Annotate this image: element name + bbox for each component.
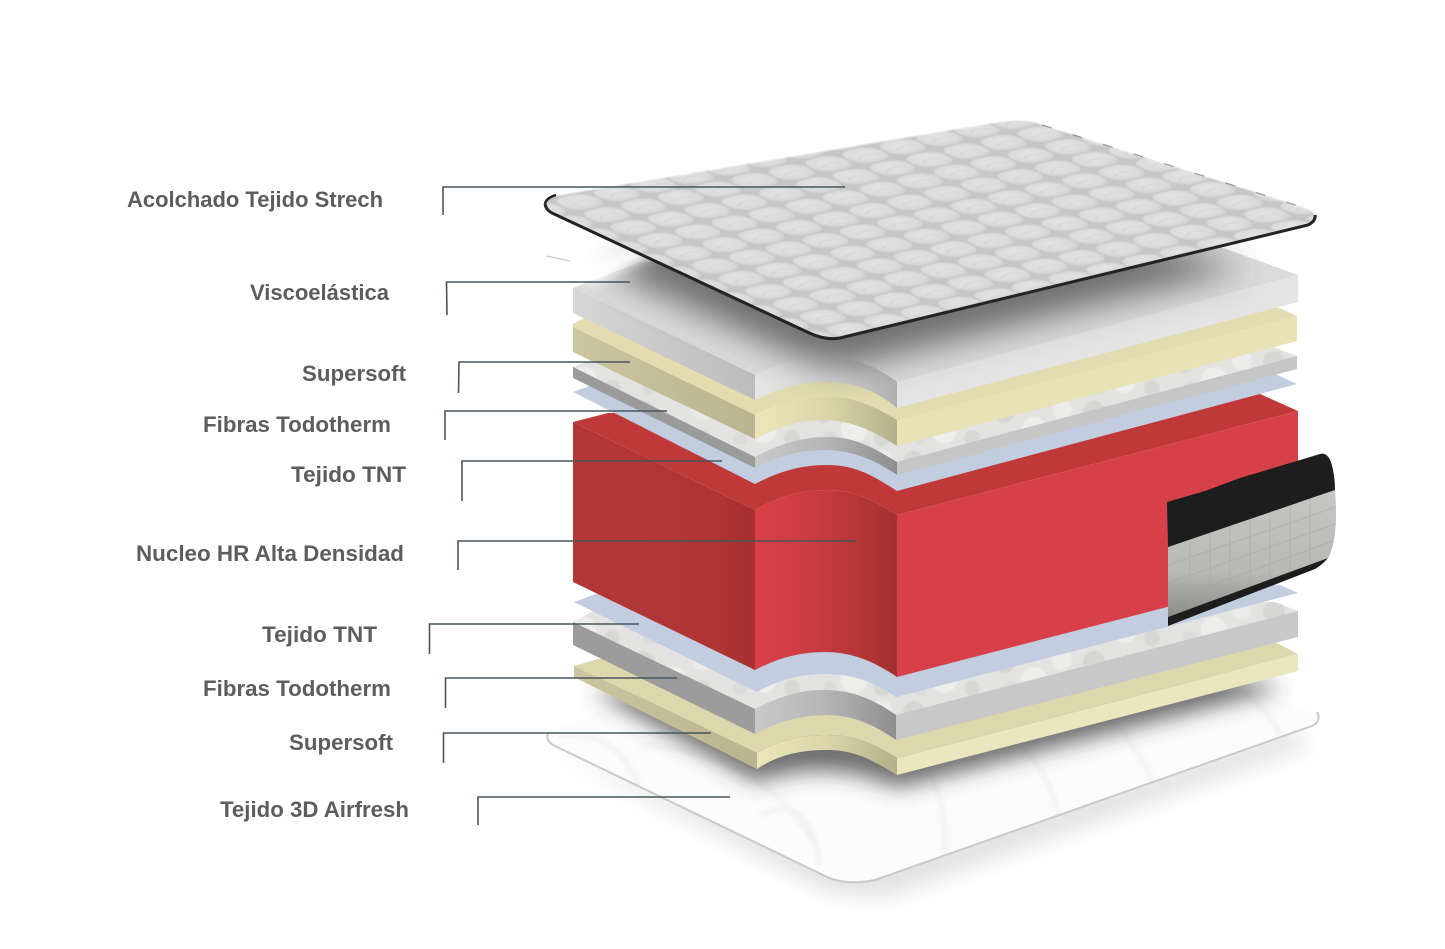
panel: upper Fibras Todotherm layer — [573, 347, 1297, 475]
label: Nucleo HR Alta Densidad: Nucleo HR Alta Densidad — [136, 541, 404, 566]
label: Supersoft lower — [289, 730, 711, 763]
label: Viscoelástica: Viscoelástica — [250, 280, 390, 305]
shadow under mattress layers — [590, 670, 1285, 788]
label: Tejido TNT upper — [291, 461, 722, 501]
label: Tejido TNT upper: Tejido TNT — [291, 462, 407, 487]
label: Viscoelástica — [250, 280, 630, 315]
panel: lower Tejido TNT layer — [574, 585, 1298, 697]
label: Nucleo HR Alta Densidad — [136, 541, 856, 570]
label: Tejido TNT lower — [262, 622, 639, 654]
panel: lower Fibras Todotherm layer — [573, 602, 1298, 740]
panel: Tejido 3D Airfresh bottom cover — [547, 685, 1319, 897]
panel: Acolchado Tejido Strech quilted top — [545, 121, 1315, 339]
label: Supersoft lower: Supersoft — [289, 730, 394, 755]
label: Tejido 3D Airfresh: Tejido 3D Airfresh — [220, 797, 409, 822]
panel: lower Supersoft layer — [574, 643, 1298, 775]
panel: mattress side sample swatch — [1167, 454, 1336, 626]
label: Fibras Todotherm lower: Fibras Todotherm — [203, 676, 391, 701]
label: Fibras Todotherm upper: Fibras Todotherm — [203, 412, 391, 437]
label: Supersoft upper — [302, 361, 630, 393]
panel: upper Supersoft layer — [573, 305, 1297, 446]
label: Acolchado Tejido Strech — [127, 187, 845, 215]
label: Fibras Todotherm lower — [203, 676, 677, 708]
label: Fibras Todotherm upper — [203, 411, 667, 440]
panel: Viscoelastica layer — [573, 245, 1298, 408]
panel: Nucleo HR red foam core — [573, 394, 1298, 677]
label: Acolchado Tejido Strech: Acolchado Tejido Strech — [127, 187, 383, 212]
label: Tejido 3D Airfresh — [220, 797, 730, 825]
label: Supersoft upper: Supersoft — [302, 361, 407, 386]
label: Tejido TNT lower: Tejido TNT — [262, 622, 378, 647]
panel: upper Tejido TNT layer — [573, 374, 1297, 491]
shadow cast by top quilted layer — [612, 200, 1245, 368]
